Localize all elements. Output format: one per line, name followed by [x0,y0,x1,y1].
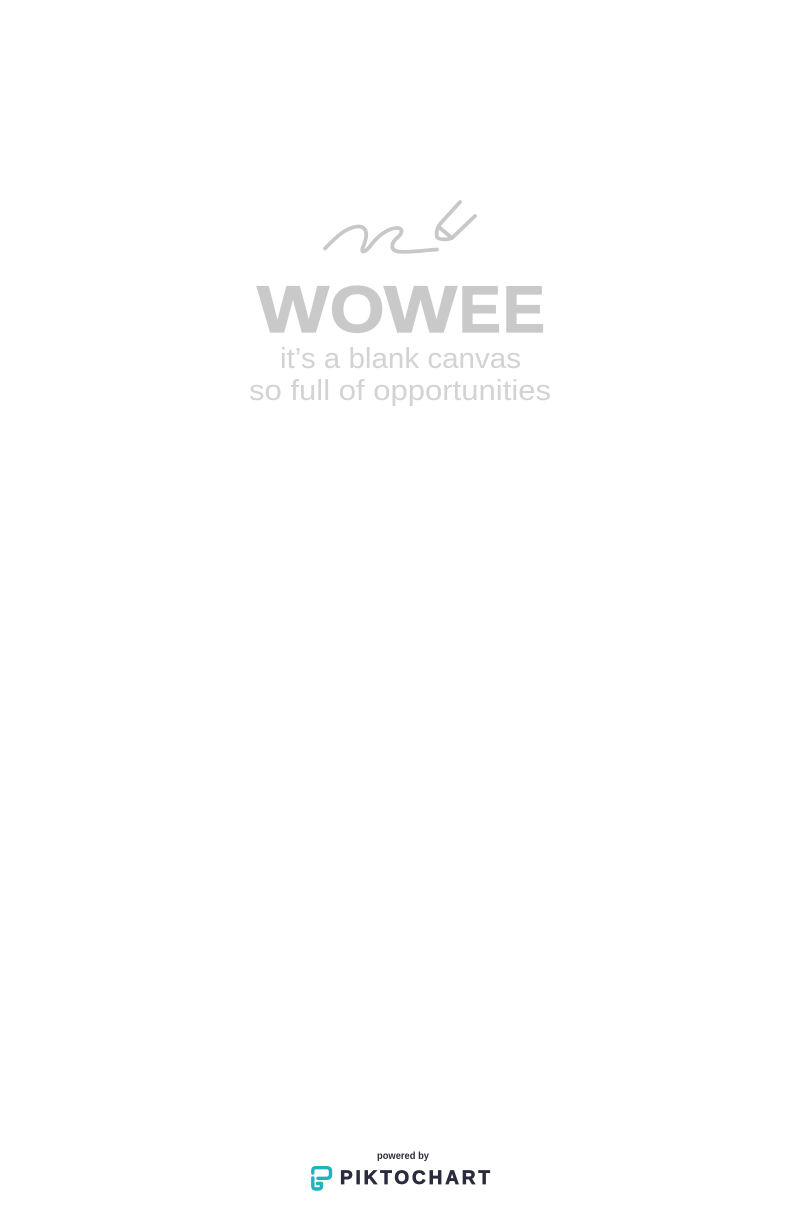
subtitle: it’s a blank canvas [280,343,521,375]
title: W [384,272,458,346]
title: E [503,272,545,346]
title: W [257,272,330,346]
powered by label: powered by [377,1151,429,1162]
icon: Piktochart logo mark [313,1168,330,1189]
title: E [459,272,501,346]
footer: powered by Piktochart [313,1151,490,1189]
title [257,272,545,346]
icon: pen scribble [325,202,475,252]
title: O [330,272,385,346]
subtitle [249,343,551,407]
wordmark: PIKTOCHART [340,1168,490,1189]
subtitle: so full of opportunities [249,375,551,407]
